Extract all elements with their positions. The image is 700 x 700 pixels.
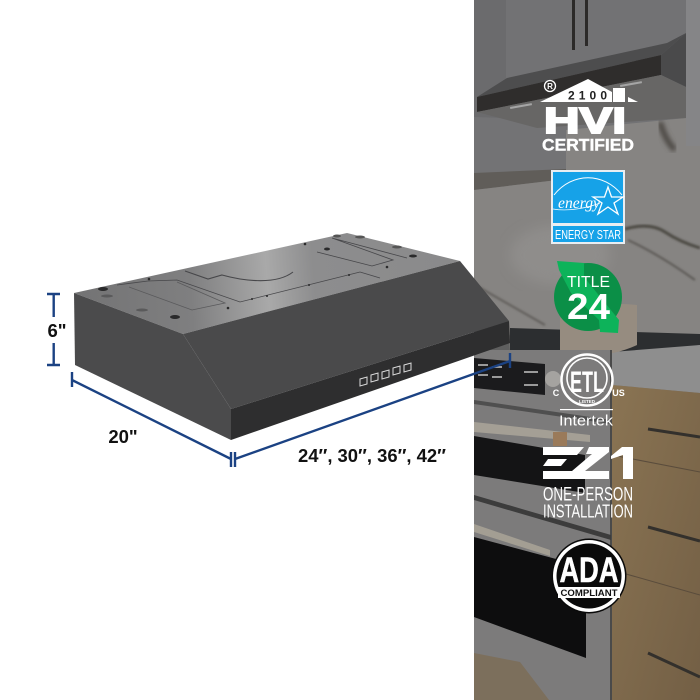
- hood front slant: [183, 261, 509, 409]
- badge: ADA compliant: COMPLIANT: [560, 588, 618, 599]
- oven: [474, 350, 612, 700]
- dimension: width options: [235, 353, 510, 467]
- dimension: width options: 24″, 30″, 36″, 42″: [298, 445, 446, 466]
- background range hood: [477, 33, 686, 128]
- badge: Energy Star: energy: [558, 195, 601, 212]
- badge: HVI certified: 2100: [568, 88, 607, 102]
- dimension: depth 20 inches: 20": [108, 426, 138, 447]
- EZ1 logo: [543, 447, 633, 479]
- badge: ETL listed Intertek: C: [553, 388, 560, 398]
- house roof: [540, 79, 612, 102]
- upper cabinets: [474, 0, 700, 190]
- badge: Title 24: [554, 261, 622, 333]
- badge: ADA compliant: ADA: [560, 551, 618, 590]
- badge: Energy Star: [551, 170, 625, 244]
- wood drawers: [612, 385, 700, 700]
- badge: Title 24: 24: [567, 286, 610, 327]
- badge: ETL listed Intertek: US: [612, 388, 625, 398]
- hood side panel: [74, 293, 231, 440]
- badge: HVI certified: HVI: [544, 100, 626, 141]
- badge: Title 24: TITLE: [567, 274, 610, 291]
- hood top surface: [74, 233, 460, 334]
- badge: HVI certified: CERTIFIED: [542, 136, 634, 154]
- badge: EZ1 one-person installation: [543, 447, 633, 522]
- badge: HVI certified: R: [547, 82, 553, 91]
- badge: ETL listed Intertek: [553, 354, 625, 430]
- hood front strip: [231, 321, 510, 440]
- control buttons: [360, 363, 411, 386]
- product: range hood: [74, 233, 510, 440]
- dimension: depth 20 inches: [72, 372, 231, 467]
- hood top surface details: [117, 238, 407, 310]
- badge: ETL listed Intertek: LISTED: [579, 399, 596, 404]
- dimension: height 6 inches: 6": [47, 320, 67, 341]
- panel: kitchen background photo: [474, 0, 700, 700]
- marble backsplash: [474, 118, 700, 352]
- badge: HVI certified: [540, 79, 638, 154]
- badge: Energy Star: ENERGY STAR: [555, 228, 621, 242]
- badge: ADA compliant: [552, 538, 626, 614]
- badge: EZ1 one-person installation: INSTALLATION: [543, 501, 633, 522]
- badge: EZ1 one-person installation: ONE-PERSON: [543, 484, 633, 506]
- dimension: height 6 inches: [47, 294, 67, 365]
- badge: ETL listed Intertek: Intertek: [559, 412, 614, 430]
- stove top, pot and counter: [510, 304, 700, 393]
- badge: ETL listed Intertek: ETL: [570, 366, 604, 399]
